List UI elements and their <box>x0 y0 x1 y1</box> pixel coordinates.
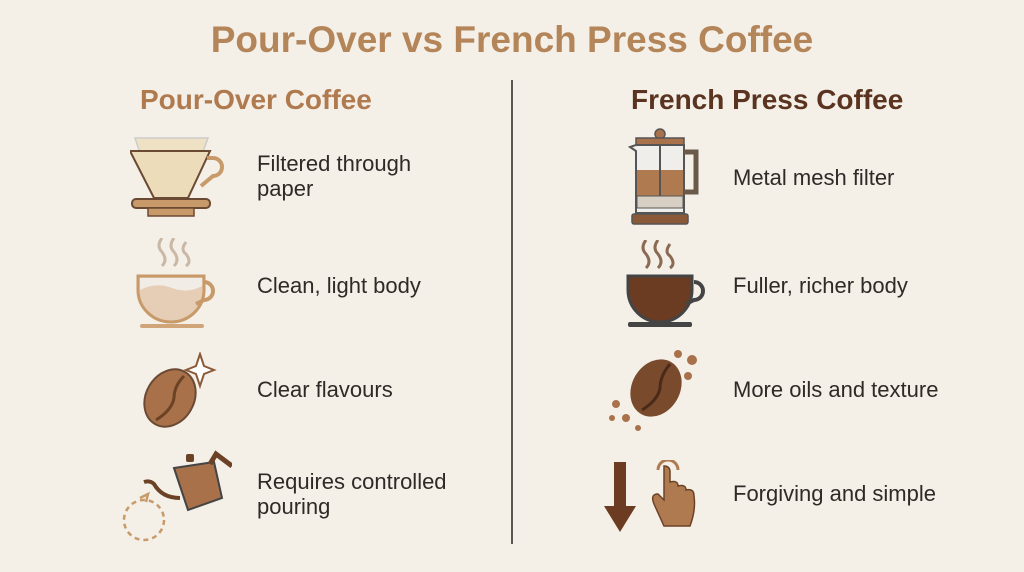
icon: press down <box>604 460 696 532</box>
text: pouring: pouring <box>257 494 330 519</box>
icon: bean sparkle <box>143 352 216 428</box>
panel: pour-over <box>122 137 447 542</box>
icon: french press <box>628 128 698 225</box>
icon: dripper <box>130 137 224 217</box>
heading: french press: French Press Coffee <box>631 84 903 115</box>
text: filtered: paper <box>257 176 313 201</box>
text: fuller: Fuller, richer body <box>733 273 908 298</box>
title: Pour-Over vs French Press Coffee <box>211 19 813 60</box>
divider <box>511 80 513 544</box>
text: pouring: Requires controlled <box>257 469 447 494</box>
text: forgiving: Forgiving and simple <box>733 481 936 506</box>
text: filtered: Filtered through <box>257 151 411 176</box>
icon: bean oil <box>609 350 697 431</box>
text: oils: More oils and texture <box>733 377 938 402</box>
panel: french press <box>604 128 938 532</box>
text: clean: Clean, light body <box>257 273 421 298</box>
text: clear: Clear flavours <box>257 377 393 402</box>
text: mesh: Metal mesh filter <box>733 165 894 190</box>
heading: pour-over: Pour-Over Coffee <box>140 84 372 115</box>
icon: light cup <box>136 238 215 328</box>
icon: dark cup <box>626 240 705 327</box>
text: pouring <box>257 469 447 519</box>
text: filtered <box>257 151 411 201</box>
icon: kettle <box>122 450 232 542</box>
